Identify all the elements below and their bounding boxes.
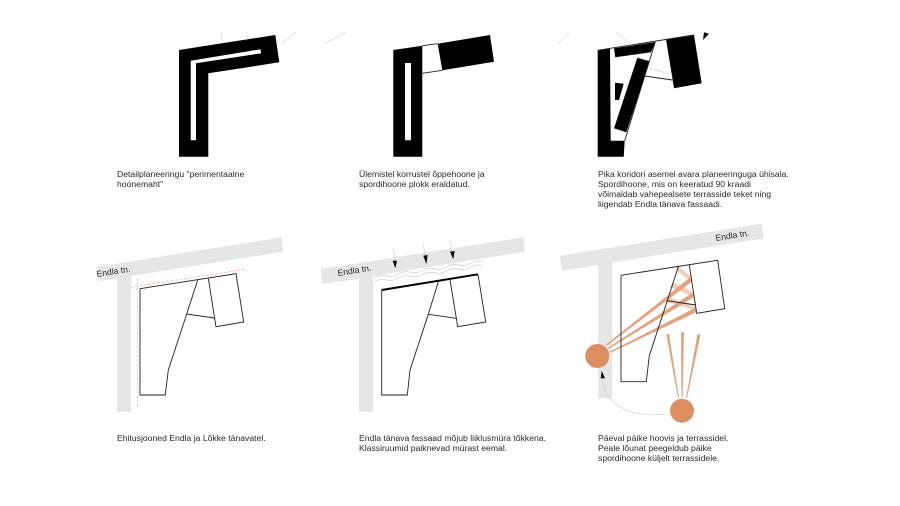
caption: [598, 169, 789, 209]
building outline: [140, 274, 244, 395]
outline lines: [598, 35, 694, 141]
caption: spordihoone küljelt terrassidele.: [598, 453, 719, 463]
building outline: [621, 260, 725, 382]
sun path arc: [602, 378, 667, 415]
connector outline: [422, 44, 442, 73]
caption: Ülemistel korrustel õppehoone ja: [359, 169, 485, 179]
dashed building lines: [131, 269, 247, 409]
streets: [97, 237, 283, 412]
street label: Endla tn.: [337, 263, 372, 278]
plan: rotated block: [614, 58, 650, 132]
caption: spordihoone plokk eraldatud.: [359, 179, 470, 189]
plan: left wing: [598, 48, 625, 157]
noise waves: [374, 261, 482, 282]
streets: [321, 237, 525, 412]
plan: sports block: [438, 35, 494, 70]
panel: sunlight: [560, 224, 764, 463]
thick facade: [382, 274, 478, 290]
caption: Klassiruumid paiknevad mürast eemal.: [359, 443, 507, 453]
caption: Detailplaneeringu "perimentaalne: [117, 169, 244, 179]
panel: perimeter building volume: [117, 32, 347, 189]
caption: [598, 433, 728, 463]
caption: võimaldab vahepealsete terrasside teket ning: [598, 189, 771, 199]
context lines: [558, 32, 672, 75]
plan: school block: [393, 46, 422, 157]
icon: west sun: [585, 344, 609, 368]
plan: sports block: [666, 35, 702, 88]
caption: Endla tänava fassaad mõjub liiklusmüra tõkkena.: [359, 433, 546, 443]
panel: open plan and rotated sports hall: [558, 32, 789, 209]
caption: [359, 169, 485, 189]
plan: top bar: [614, 42, 655, 57]
caption: [117, 169, 244, 189]
caption: Päeval päike hoovis ja terrassidel.: [598, 433, 728, 443]
streets: [560, 224, 764, 398]
caption: Pika koridori asemel avara planeeringuga ühisala.: [598, 169, 789, 179]
context lines: [222, 32, 347, 44]
street label: Endla tn.: [715, 228, 750, 243]
sun rays from south: [666, 332, 700, 398]
noise arrows: [393, 240, 455, 268]
plan: L-shaped block: [179, 35, 279, 157]
caption: [359, 433, 546, 453]
caption: Spordihoone, mis on keeratud 90 kraadi: [598, 179, 751, 189]
street label: Endla tn.: [96, 264, 131, 279]
icon: south sun: [670, 399, 694, 423]
icon: sun path arrowhead: [601, 371, 605, 378]
caption: Peale lõunat peegeldub päike: [598, 443, 712, 453]
panel: building lines: [96, 237, 283, 443]
panel: traffic noise: [321, 237, 546, 453]
sun rays from west: [606, 278, 696, 353]
pale reflected rays: [666, 266, 696, 310]
plan: small block: [615, 83, 624, 100]
icon: small arrow: [703, 32, 709, 40]
caption: hoonemaht": [117, 179, 163, 189]
building outline: [382, 274, 486, 395]
caption: Ehitusjooned Endla ja Lõkke tänavatel.: [117, 433, 266, 443]
panel: separated upper floors: [359, 35, 494, 189]
caption: liigendab Endla tänava fassaadi.: [598, 199, 722, 209]
